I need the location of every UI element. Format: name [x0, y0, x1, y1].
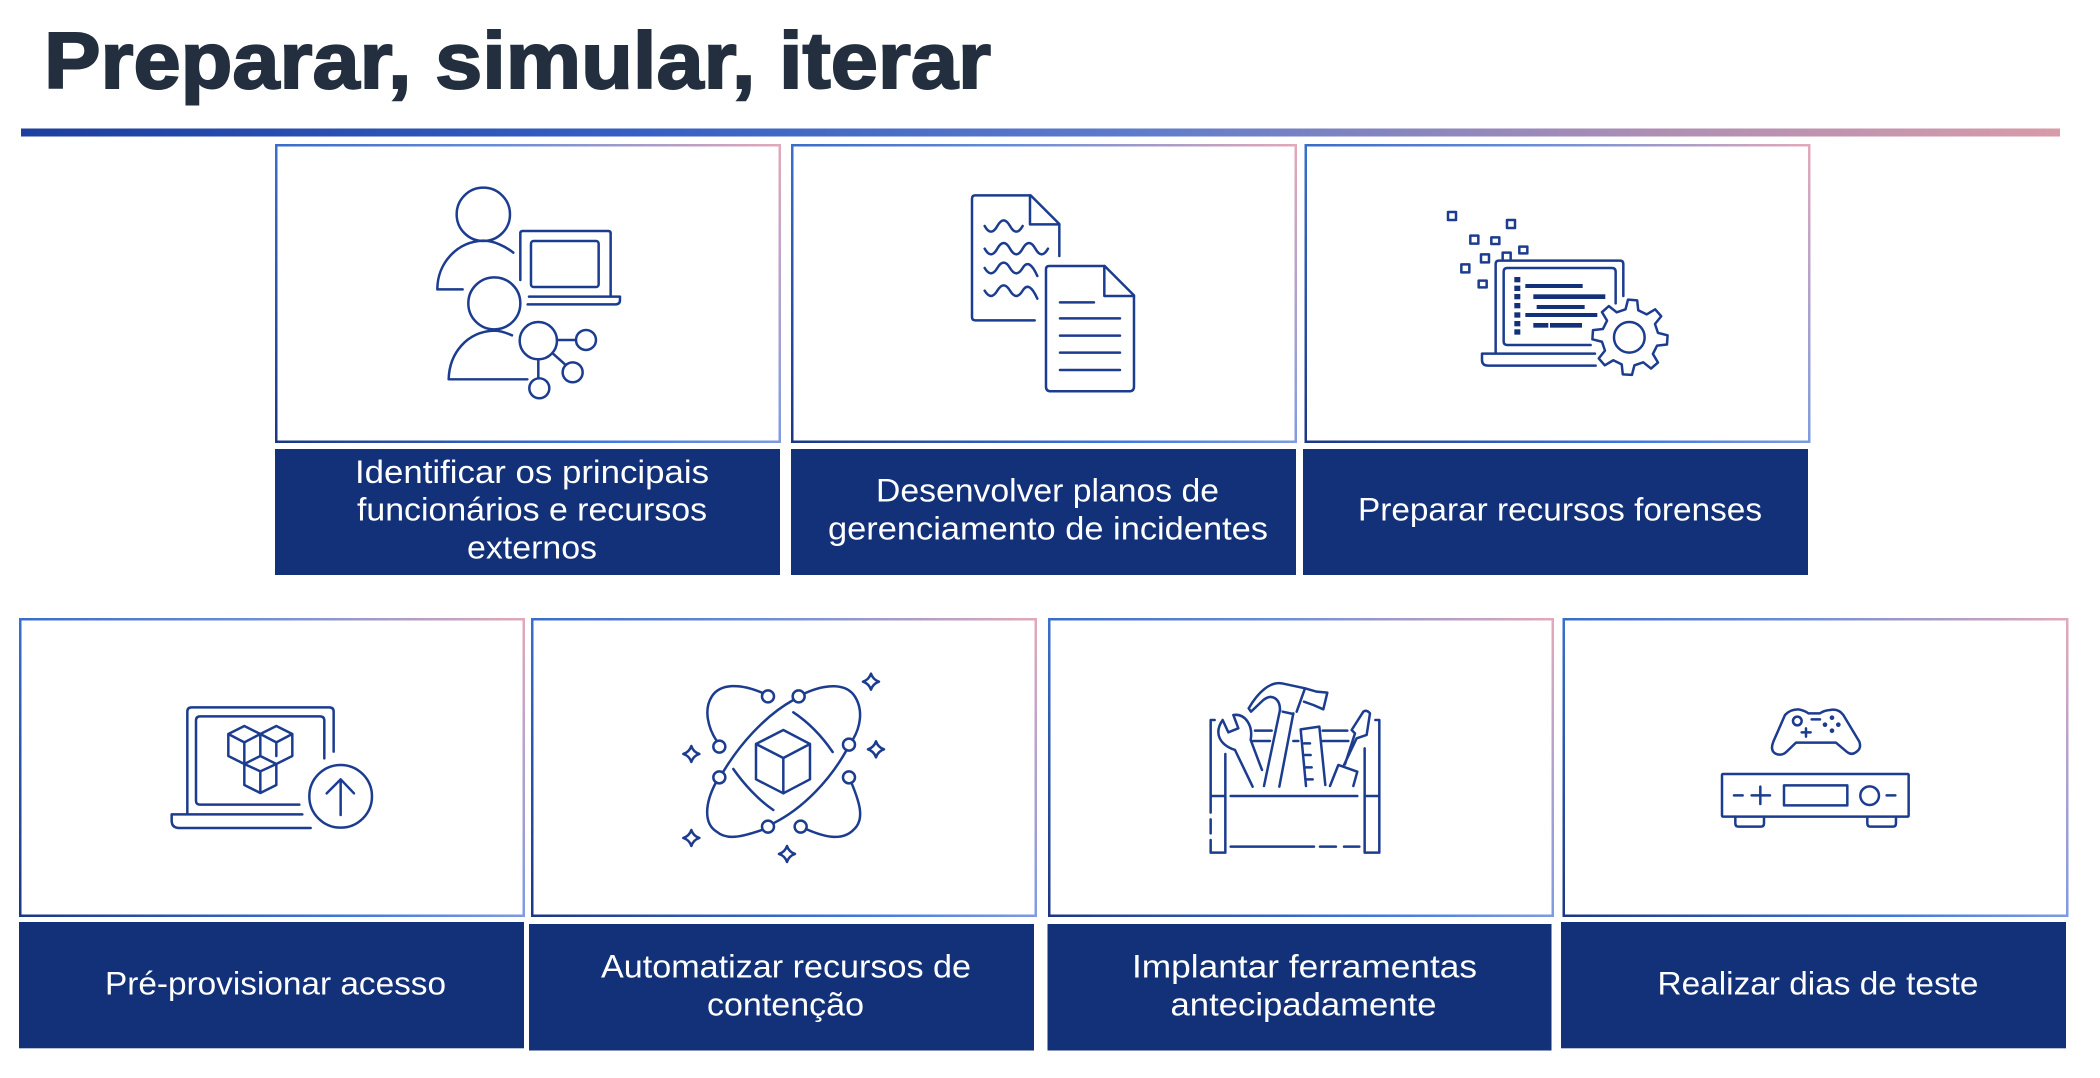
caption text: Implantar ferramentas: [1132, 948, 1477, 984]
caption text: [1132, 948, 1477, 1022]
panel: identificar funcionários: [275, 144, 781, 575]
caption text: Identificar os principais: [355, 454, 709, 490]
caption bar: [275, 449, 780, 575]
caption text: antecipadamente: [1170, 986, 1436, 1022]
caption text: Pré-provisionar acesso: [105, 966, 446, 1002]
icon: people with laptop and network: [437, 188, 620, 398]
panel: planos de incidentes: [791, 144, 1297, 575]
caption bar: [791, 449, 1296, 575]
card frame: [275, 144, 781, 443]
caption text: funcionários e recursos: [357, 492, 707, 528]
caption text: gerenciamento de incidentes: [828, 510, 1268, 546]
caption bar: [1561, 922, 2066, 1048]
card frame: [19, 618, 525, 917]
panel: implantar ferramentas: [1048, 618, 1554, 1050]
caption text: Automatizar recursos de: [601, 948, 971, 984]
icon: cube with orbits: [683, 674, 884, 862]
caption bar: [1303, 449, 1808, 575]
card frame: [1562, 618, 2068, 917]
panel: pré-provisionar acesso: [19, 618, 525, 1048]
card frame: [1048, 618, 1554, 917]
icon: game controller and console: [1722, 709, 1909, 827]
caption text: Preparar recursos forenses: [1358, 492, 1762, 528]
panel: recursos de contenção: [529, 618, 1037, 1050]
caption text: Desenvolver planos de: [876, 472, 1219, 508]
caption text: [355, 454, 709, 566]
caption bar: [529, 924, 1034, 1050]
panel: recursos forenses: [1303, 144, 1810, 575]
caption text: Realizar dias de teste: [1658, 966, 1978, 1002]
panel: dias de teste: [1561, 618, 2068, 1048]
caption text: [828, 472, 1268, 546]
caption text: contenção: [707, 986, 864, 1022]
card frame: [531, 618, 1037, 917]
icon: two documents: [972, 195, 1134, 391]
caption bar: [19, 922, 524, 1048]
caption text: externos: [467, 530, 597, 566]
card frame: [1304, 144, 1810, 443]
icon: laptop with cubes and upload: [172, 707, 372, 828]
title gradient rule: [21, 128, 2060, 136]
caption bar: [1048, 924, 1552, 1050]
caption text: [601, 948, 971, 1022]
card frame: [791, 144, 1297, 443]
icon: laptop with code and gear: [1448, 212, 1668, 375]
title: Preparar, simular, iterar: [44, 16, 991, 105]
icon: toolbox: [1211, 683, 1379, 853]
